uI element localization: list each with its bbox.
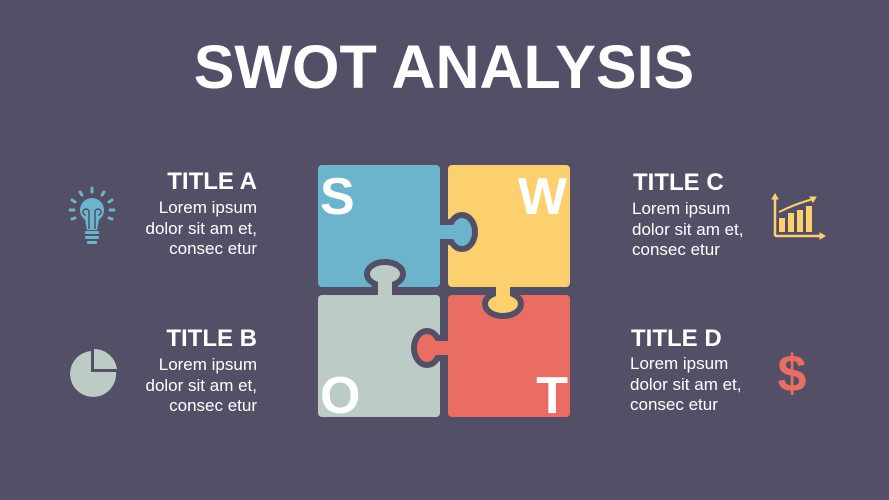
piece: S bbox=[318, 165, 440, 287]
letters bbox=[320, 168, 568, 425]
icon: bar chart bbox=[772, 194, 825, 239]
puzzle bbox=[318, 165, 570, 425]
piece: O bbox=[318, 295, 440, 417]
text block: D: consec etur bbox=[630, 395, 718, 414]
text block: C: dolor sit am et, bbox=[632, 220, 744, 239]
text block: B: Lorem ipsum bbox=[159, 355, 257, 374]
text block: A: Lorem ipsum bbox=[159, 198, 257, 217]
icon: pie chart bbox=[70, 349, 117, 397]
text block: B bbox=[146, 325, 257, 415]
text block: C bbox=[632, 169, 744, 259]
icon: light bulb bbox=[70, 188, 114, 244]
tab: O into S bbox=[367, 262, 403, 306]
text block: B: dolor sit am et, bbox=[146, 376, 257, 395]
text block: A bbox=[146, 168, 257, 258]
text block: B: consec etur bbox=[169, 396, 257, 415]
text block: D: TITLE D bbox=[631, 325, 722, 352]
icon: dollar: $ bbox=[778, 345, 807, 403]
text block: B: TITLE B bbox=[166, 325, 257, 352]
text block: D: Lorem ipsum bbox=[630, 354, 728, 373]
text block: C: TITLE C bbox=[633, 169, 724, 196]
text block: C: consec etur bbox=[632, 240, 720, 259]
letters: O bbox=[320, 367, 360, 425]
letters: S bbox=[320, 168, 355, 226]
tab: T into O bbox=[414, 331, 459, 365]
text block: A: TITLE A bbox=[167, 168, 257, 195]
tab: W into T bbox=[485, 276, 521, 316]
letters: W bbox=[518, 168, 568, 226]
text block: C: Lorem ipsum bbox=[632, 199, 730, 218]
tab: S into W bbox=[430, 215, 475, 249]
piece: W bbox=[448, 165, 570, 287]
text block: A: consec etur bbox=[169, 239, 257, 258]
piece: T bbox=[448, 295, 570, 417]
text block: D bbox=[630, 325, 742, 414]
text block: A: dolor sit am et, bbox=[146, 219, 257, 238]
letters: T bbox=[536, 367, 568, 425]
text block: D: dolor sit am et, bbox=[630, 375, 742, 394]
title: SWOT ANALYSIS bbox=[194, 33, 694, 101]
